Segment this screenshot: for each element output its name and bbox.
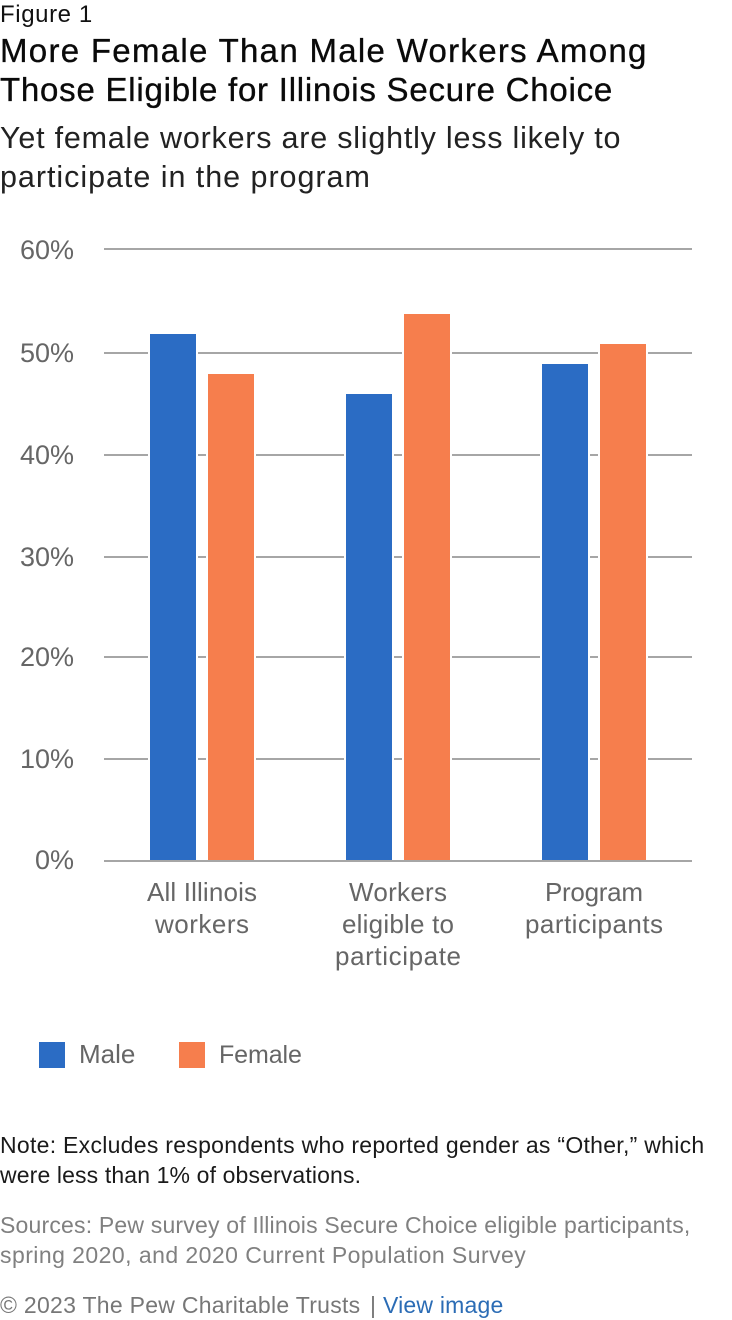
- category labels: All Illinois: [147, 877, 257, 907]
- legend swatch: female: [179, 1042, 205, 1068]
- view image link: View image: [383, 1292, 503, 1318]
- title: [0, 32, 648, 108]
- category labels: participate: [335, 941, 461, 971]
- y axis labels: 0%: [35, 845, 74, 875]
- legend label: male: Male: [79, 1039, 135, 1069]
- y axis labels: 10%: [20, 744, 74, 774]
- category labels: [147, 877, 663, 971]
- bar chart: [20, 235, 692, 971]
- subtitle: [0, 121, 621, 194]
- y axis labels: 60%: [20, 235, 74, 265]
- category labels: eligible to: [342, 909, 454, 939]
- subtitle: Yet female workers are slightly less likely to: [0, 121, 621, 155]
- sources: Sources: Pew survey of Illinois Secure Choice eligible participants,: [0, 1212, 690, 1238]
- category labels: workers: [154, 909, 249, 939]
- subtitle: participate in the program: [0, 160, 371, 194]
- category labels: Workers: [349, 877, 447, 907]
- y axis labels: 30%: [20, 542, 74, 572]
- legend: [39, 1039, 302, 1069]
- female bars: [208, 314, 646, 860]
- note: were less than 1% of observations.: [0, 1162, 361, 1188]
- copyright: © 2023 The Pew Charitable Trusts: [0, 1292, 360, 1318]
- male bars: [150, 334, 588, 860]
- sources: spring 2020, and 2020 Current Population Survey: [0, 1242, 526, 1268]
- category labels: Program: [545, 877, 643, 907]
- category labels: participants: [525, 909, 663, 939]
- note: Note: Excludes respondents who reported gender as “Other,” which: [0, 1132, 704, 1158]
- separator: |: [370, 1292, 376, 1318]
- bar halos: [148, 312, 648, 860]
- copyright and link: [0, 1292, 503, 1318]
- y axis labels: 50%: [20, 338, 74, 368]
- y axis labels: [20, 235, 74, 875]
- figure label: Figure 1: [0, 1, 93, 28]
- title: Those Eligible for Illinois Secure Choice: [0, 71, 613, 108]
- note: [0, 1132, 704, 1188]
- title: More Female Than Male Workers Among: [0, 32, 648, 69]
- sources: [0, 1212, 690, 1268]
- y axis labels: 20%: [20, 642, 74, 672]
- y axis labels: 40%: [20, 440, 74, 470]
- legend swatch: male: [39, 1042, 65, 1068]
- legend label: female: Female: [219, 1041, 302, 1069]
